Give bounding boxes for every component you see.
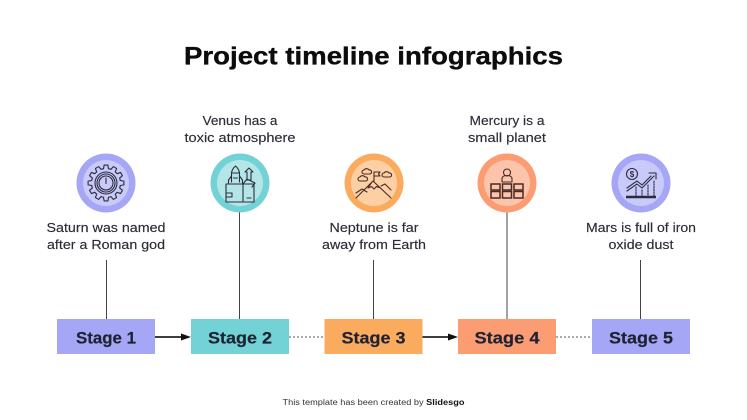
text: Saturn: after a Roman god — [47, 238, 165, 252]
stage 1 panel — [57, 319, 155, 354]
text: Mercury: small planet — [468, 131, 547, 145]
icon: rocket in box — [210, 154, 270, 212]
icon: growth chart with dollar coin — [612, 154, 670, 212]
footer credit: This template has been created by Slidesgo — [282, 398, 465, 407]
stage 3 panel — [324, 319, 422, 354]
connector lines — [106, 212, 640, 319]
stage 5 panel: Stage 5 — [609, 330, 673, 348]
title: Project timeline infographics — [184, 42, 563, 70]
dotted link: stage 4 to stage 5 — [556, 336, 592, 338]
icon: org chart team — [478, 154, 536, 212]
stage 5 panel — [592, 319, 690, 354]
stage 2 panel: Stage 2 — [208, 330, 272, 348]
text: Mars: Mars is full of iron — [586, 221, 696, 235]
icon: mountain with flag — [344, 154, 404, 212]
text: Neptune: Neptune is far — [330, 221, 418, 235]
stage 1 panel: Stage 1 — [76, 330, 136, 348]
stage 2 panel — [191, 319, 289, 354]
stage 4 panel: Stage 4 — [474, 330, 540, 348]
dotted link: stage 2 to stage 3 — [289, 336, 324, 338]
arrow: stage 1 to stage 2 — [155, 334, 191, 340]
text: Mercury: Mercury is a — [470, 114, 545, 128]
text: Neptune: away from Earth — [322, 238, 426, 252]
icon: gear with clock — [76, 154, 136, 212]
stage 4 panel — [458, 319, 556, 354]
arrow: stage 3 to stage 4 — [422, 334, 458, 340]
text: Venus: toxic atmosphere — [184, 131, 296, 145]
stage 3 panel: Stage 3 — [342, 330, 406, 348]
icon: growth chart with dollar coin: $ — [630, 170, 635, 179]
text: Saturn: Saturn was named — [46, 221, 166, 235]
text: Venus: Venus has a — [202, 114, 278, 128]
text: Mars: oxide dust — [608, 238, 674, 252]
